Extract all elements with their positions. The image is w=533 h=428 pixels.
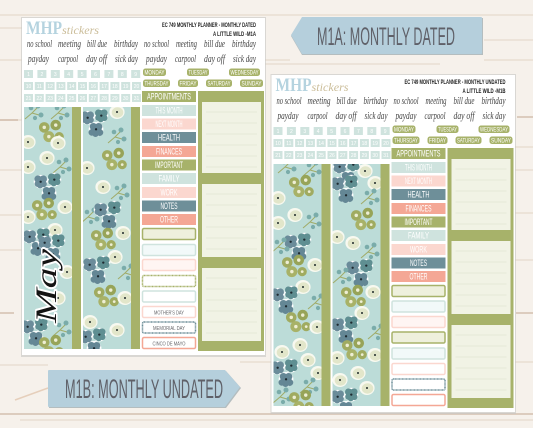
date grid: 22 [286,153,292,159]
weekday tags: TUESDAY [438,128,457,134]
category labels: NEXT MONTH [156,119,182,129]
handwritten stickers: sick day [364,111,388,122]
date grid: 17 [101,84,107,90]
date grid: 27 [340,153,346,159]
date grid: 9 [134,72,137,78]
date grid: 20 [134,84,139,90]
date grid: 2 [290,129,293,135]
date grid: 11 [37,84,42,90]
weekday tags: WEDNESDAY [230,70,258,76]
date grid: 15 [329,141,335,147]
weekday tags: SUNDAY [491,138,511,144]
handwritten stickers: birthday [232,39,256,50]
notes panel [448,148,514,408]
sheet title: A LITTLE WILD -M1B [462,88,506,95]
handwritten stickers: meeting [176,39,197,50]
date grid: 16 [340,141,346,147]
handwritten stickers: carpool [424,111,446,122]
label: M1B monthly undated: M1B: MONTHLY UNDATED [65,374,223,404]
date grid: 12 [47,84,53,90]
handwritten stickers: no school [27,39,52,50]
date grid [274,127,390,159]
date grid: 4 [67,72,70,78]
date grid: 6 [344,129,347,135]
date grid: 10 [26,84,31,90]
outlined stickers [142,228,196,348]
handwritten stickers: no school [276,96,302,107]
date grid: 23 [297,153,303,159]
date grid: 1 [277,129,280,135]
weekday tags: FRIDAY [180,82,196,88]
handwritten stickers [276,96,506,122]
date grid: 20 [383,141,389,147]
weekday tags: TUESDAY [188,70,208,76]
handwritten stickers: day off [336,111,357,122]
logo [276,75,349,96]
date grid: 30 [123,96,129,102]
date grid: 31 [134,96,139,102]
handwritten stickers: bill due [336,96,357,107]
sheet title: A LITTLE WILD -M1A [213,31,256,38]
date grid: 26 [80,96,85,102]
date grid: 31 [383,153,389,159]
date grid: 16 [91,84,96,90]
date grid: 21 [26,96,31,102]
handwritten stickers: sick day [482,111,506,122]
date grid: 13 [308,141,313,147]
date grid: 18 [112,84,118,90]
category labels: IMPORTANT [404,217,433,227]
label: M1B monthly undated [48,370,241,408]
date grid: 9 [384,129,387,135]
handwritten stickers: bill due [204,39,225,50]
category labels [142,91,196,225]
category labels: NOTES [160,201,178,211]
date grid: 28 [351,153,357,159]
date grid: 3 [303,129,306,135]
handwritten stickers: carpool [175,54,196,65]
sheet title [404,79,506,95]
handwritten stickers: day off [86,54,108,65]
date grid: 4 [317,129,320,135]
weekday tags: SATURDAY [208,82,230,88]
sheet title: EC 749 MONTHLY PLANNER - MONTHLY DATED [162,22,256,29]
category labels: OTHER [160,214,178,224]
date grid: 14 [69,84,75,90]
outlined stickers: CINCO DE MAYO [152,342,186,348]
date grid: 12 [297,141,303,147]
sheet: M1B monthly undated [270,74,516,416]
handwritten stickers: no school [394,96,419,107]
date grid: 24 [308,153,313,159]
handwritten stickers: bill due [87,39,107,50]
category labels: APPOINTMENTS [147,92,191,102]
category labels: WORK [410,244,427,254]
date grid: 5 [81,72,84,78]
logo: MHP [26,18,62,39]
category labels: WORK [160,188,178,198]
category labels: FAMILY [408,230,429,240]
weekday tags: WEDNESDAY [480,128,508,134]
handwritten stickers: no school [144,39,169,50]
handwritten stickers: bill due [454,96,475,107]
notes panel [198,91,264,351]
date grid: 19 [372,141,378,147]
outlined stickers [392,286,445,406]
date grid: 15 [80,84,85,90]
handwritten stickers: sick day [115,54,138,65]
category labels: FINANCES [406,204,432,214]
date grid: 21 [275,153,281,159]
category labels: APPOINTMENTS [396,148,440,158]
category labels: HEALTH [158,132,180,142]
logo: MHP [276,75,312,96]
date grid: 7 [357,129,360,135]
date grid: 23 [47,96,53,102]
category labels [392,148,446,282]
sheet title [162,22,256,38]
date grid: 18 [362,141,367,147]
date grid: 27 [91,96,96,102]
handwritten stickers: sick day [233,54,256,65]
label: M1A monthly dated [291,17,483,55]
date grid: 3 [54,72,57,78]
handwritten stickers [27,39,256,65]
handwritten stickers: meeting [58,39,81,50]
date grid: 26 [329,153,335,159]
logo: stickers [62,23,99,37]
date grid: 10 [275,141,281,147]
weekday tags [143,68,263,88]
weekday tags: THURSDAY [394,138,418,144]
handwritten stickers: meeting [308,96,330,107]
category labels: NEXT MONTH [405,176,432,186]
category labels: IMPORTANT [155,160,183,170]
handwritten stickers: carpool [58,54,78,65]
category labels: OTHER [410,272,428,282]
handwritten stickers: payday [395,111,417,122]
logo: stickers [312,80,349,94]
weekday tags: MONDAY [394,128,414,134]
category labels: THIS MONTH [405,162,432,172]
weekday tags: FRIDAY [429,138,446,144]
weekday tags: SUNDAY [242,82,262,88]
date grid: 1 [27,72,30,78]
date grid: 8 [121,72,124,78]
date grid: 19 [123,84,129,90]
date grid: 24 [58,96,64,102]
date grid [24,70,141,102]
weekday tags: SATURDAY [457,138,480,144]
date grid: 11 [286,141,292,147]
weekday tags: MONDAY [144,70,164,76]
category labels: THIS MONTH [156,106,182,116]
sheet: M1A monthly dated [20,17,266,357]
floral strip left [24,107,81,349]
category labels: HEALTH [408,190,430,200]
logo [26,18,99,39]
handwritten stickers: birthday [114,39,138,50]
handwritten stickers: meeting [426,96,446,107]
date grid: 7 [108,72,111,78]
date grid: 2 [41,72,44,78]
date grid: 14 [318,141,324,147]
date grid: 5 [330,129,333,135]
handwritten stickers: payday [27,54,49,65]
date grid: 25 [318,153,324,159]
date grid: 28 [101,96,107,102]
handwritten stickers: birthday [482,96,506,107]
weekday tags [392,126,512,144]
month script May: May [30,248,63,324]
handwritten stickers: day off [204,54,226,65]
category labels: NOTES [410,258,427,268]
date grid: 29 [362,153,367,159]
date grid: 29 [112,96,118,102]
weekday tags: THURSDAY [144,82,168,88]
floral strip right [332,164,390,406]
date grid: 22 [37,96,42,102]
date grid: 17 [351,141,357,147]
date grid: 25 [69,96,75,102]
outlined stickers: MOTHER'S DAY [154,310,184,316]
date grid: 8 [370,129,373,135]
floral strip left [270,158,330,412]
outlined stickers: MEMORIAL DAY [153,326,185,332]
floral strip right [83,107,140,349]
handwritten stickers: payday [145,54,167,65]
date grid: 6 [94,72,97,78]
date grid: 30 [372,153,378,159]
handwritten stickers: payday [277,111,299,122]
date grid: 13 [58,84,64,90]
category labels: FAMILY [158,174,180,184]
handwritten stickers: carpool [308,111,328,122]
handwritten stickers: day off [454,111,475,122]
category labels: FINANCES [156,146,182,156]
handwritten stickers: birthday [364,96,388,107]
